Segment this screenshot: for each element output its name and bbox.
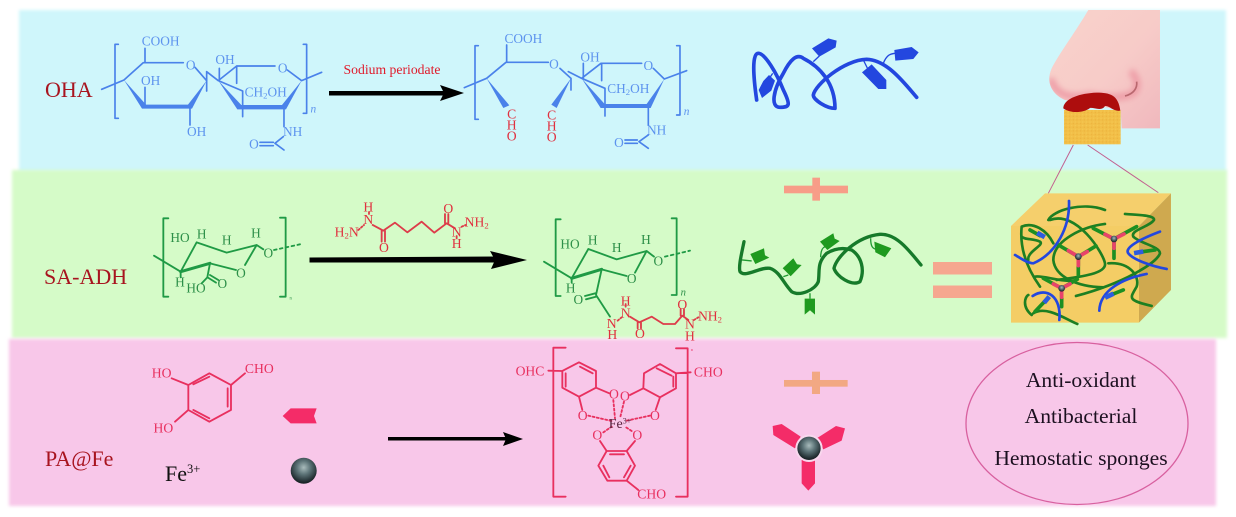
icon: equals sign [933,262,992,298]
structure: hyaluronic acid repeat unit: COOH [142,33,180,48]
structure: hyaluronic acid repeat unit: CH [245,85,263,100]
structure: adipic dihydrazide: N [349,224,359,239]
structure: oxidized hyaluronic acid [464,31,690,150]
structure: adipic dihydrazide: 2 [484,220,489,230]
structure: PA-Fe complex: CHO [694,365,723,380]
structure: oxidized hyaluronic acid: OH [580,49,600,64]
structure: sodium alginate repeat unit: HO [170,230,190,245]
structure: oxidized hyaluronic acid: 2 [626,87,630,97]
structure: sodium alginate repeat unit: H [222,233,232,248]
structure: sodium alginate repeat unit: O [236,265,246,280]
structure: sodium alginate repeat unit: HO [186,280,206,295]
arrow: adipic dihydrazide reaction [310,251,527,269]
structure: SA-ADH product: H [607,327,617,342]
structure: hyaluronic acid repeat unit: OH [267,85,287,100]
structure: PA-Fe complex: O [609,387,619,402]
structure: SA-ADH product: H [612,240,622,255]
structure: hyaluronic acid repeat unit: O [186,58,196,73]
callout: properties ellipse: Antibacterial [1025,404,1137,428]
icon: blue OHA polymer chain [754,38,919,108]
structure: hyaluronic acid repeat unit: NH [283,124,303,139]
structure: sodium alginate repeat unit: H [175,274,185,289]
structure: PA-Fe complex [516,348,723,501]
label: Fe3+: Fe [165,461,187,486]
structure: adipic dihydrazide: N [452,224,462,239]
structure: oxidized hyaluronic acid: CH [607,81,626,96]
structure: hyaluronic acid repeat unit [102,33,322,152]
icon: PA@Fe three-arm complex [773,424,845,491]
structure: SA-ADH product: O [653,253,663,268]
structure: PA-Fe complex: 3+ [623,416,632,425]
structure: SA-ADH product: N [607,316,617,331]
structure: SA-ADH product: H [621,293,631,308]
structure: sodium alginate repeat unit: n [289,296,292,301]
structure: sodium alginate repeat unit: H [197,227,207,242]
illustration: nose with bleeding sponge [1048,10,1160,193]
label: SA-ADH: SA-ADH [44,264,127,289]
structure: SA-ADH product: n [681,287,686,298]
structure: hyaluronic acid repeat unit: O [249,137,259,152]
icon: pink chevron for PA [283,408,317,423]
icon: plus sign, second [784,372,848,394]
structure: protocatechualdehyde [152,361,274,436]
structure: oxidized hyaluronic acid: C [547,108,556,123]
structure: SA-ADH product: O [627,271,637,286]
structure: PA-Fe complex: O [632,427,642,442]
structure: sodium alginate repeat unit: O [263,245,273,260]
structure: protocatechualdehyde: HO [153,421,173,436]
structure: oxidized hyaluronic acid: O [614,135,624,150]
structure: PA-Fe complex: OHC [516,363,544,378]
structure: PA-Fe complex: O [578,408,588,423]
structure: adipic dihydrazide: H [363,199,373,214]
structure: PA-Fe complex: O [650,408,660,423]
structure: SA-ADH product: HO [560,237,580,252]
arrow: sodium periodate reaction [329,62,464,101]
structure: hyaluronic acid repeat unit: OH [215,52,235,67]
panel: OHA band [19,10,1226,172]
label: OHA: OHA [45,77,93,102]
structure: hyaluronic acid repeat unit: n [310,104,316,116]
structure: SA-ADH product: 2 [718,314,722,324]
structure: adipic dihydrazide [335,199,489,255]
arrow: sodium periodate reaction: Sodium periodate [344,62,440,77]
callout: properties ellipse [966,342,1188,504]
label: PA@Fe: PA@Fe [45,446,113,471]
structure: SA-ADH product: O [677,297,687,312]
structure: hyaluronic acid repeat unit: 2 [263,91,267,101]
structure: protocatechualdehyde: CHO [245,361,274,376]
structure: oxidized hyaluronic acid: O [643,58,653,73]
structure: oxidized hyaluronic acid: NH [647,122,667,137]
structure: oxidized hyaluronic acid: COOH [504,31,543,46]
panel: SA-ADH band [12,170,1227,338]
structure: oxidized hyaluronic acid: O [507,128,517,143]
arrow: PA@Fe reaction [388,432,523,446]
structure: oxidized hyaluronic acid: n [684,106,690,118]
structure: SA-ADH product: O [574,292,584,307]
structure: protocatechualdehyde: HO [152,366,172,381]
structure: oxidized hyaluronic acid: O [549,57,559,72]
illustration: hydrogel network cube [1011,193,1171,324]
structure: SA-ADH product [544,218,722,344]
structure: oxidized hyaluronic acid: O [547,129,557,144]
structure: hyaluronic acid repeat unit: OH [187,124,207,139]
structure: SA-ADH product: O [635,326,645,341]
structure: adipic dihydrazide: H [335,224,344,239]
structure: adipic dihydrazide: O [379,240,389,255]
structure: hyaluronic acid repeat unit: O [278,61,288,76]
icon: green SA-ADH polymer chain [740,233,921,315]
structure: oxidized hyaluronic acid: C [507,107,516,122]
structure: SA-ADH product: H [588,233,598,248]
structure: SA-ADH product: NH [698,308,718,323]
structure: PA-Fe complex: Fe [609,417,623,432]
structure: adipic dihydrazide: 2 [344,230,349,240]
structure: adipic dihydrazide: N [363,212,373,227]
structure: SA-ADH product: N [621,305,631,320]
structure: adipic dihydrazide: H [452,236,462,251]
structure: oxidized hyaluronic acid: H [547,119,557,134]
icon: Fe ion ball [291,458,317,484]
structure: SA-ADH product: N [685,317,695,332]
structure: oxidized hyaluronic acid: OH [630,81,650,96]
structure: SA-ADH product: H [566,280,576,295]
structure: sodium alginate repeat unit: H [251,225,261,240]
callout: properties ellipse: Anti-oxidant [1026,368,1136,392]
icon: plus sign, first [784,178,848,201]
structure: adipic dihydrazide: NH [465,214,484,229]
panel: PA@Fe band [9,339,1216,506]
structure: SA-ADH product: H [685,329,695,344]
structure: PA-Fe complex: O [592,427,602,442]
structure: oxidized hyaluronic acid: H [507,117,517,132]
structure: SA-ADH product: H [641,232,651,247]
structure: PA-Fe complex: * [691,348,694,354]
label: Fe3+: 3+ [187,462,200,476]
structure: sodium alginate repeat unit: O [218,276,228,291]
structure: sodium alginate repeat unit [154,218,300,301]
structure: adipic dihydrazide: O [443,201,453,216]
callout: properties ellipse: Hemostatic sponges [994,446,1168,470]
structure: PA-Fe complex: O [620,388,630,403]
structure: PA-Fe complex: CHO [637,486,666,501]
structure: hyaluronic acid repeat unit: OH [141,73,161,88]
